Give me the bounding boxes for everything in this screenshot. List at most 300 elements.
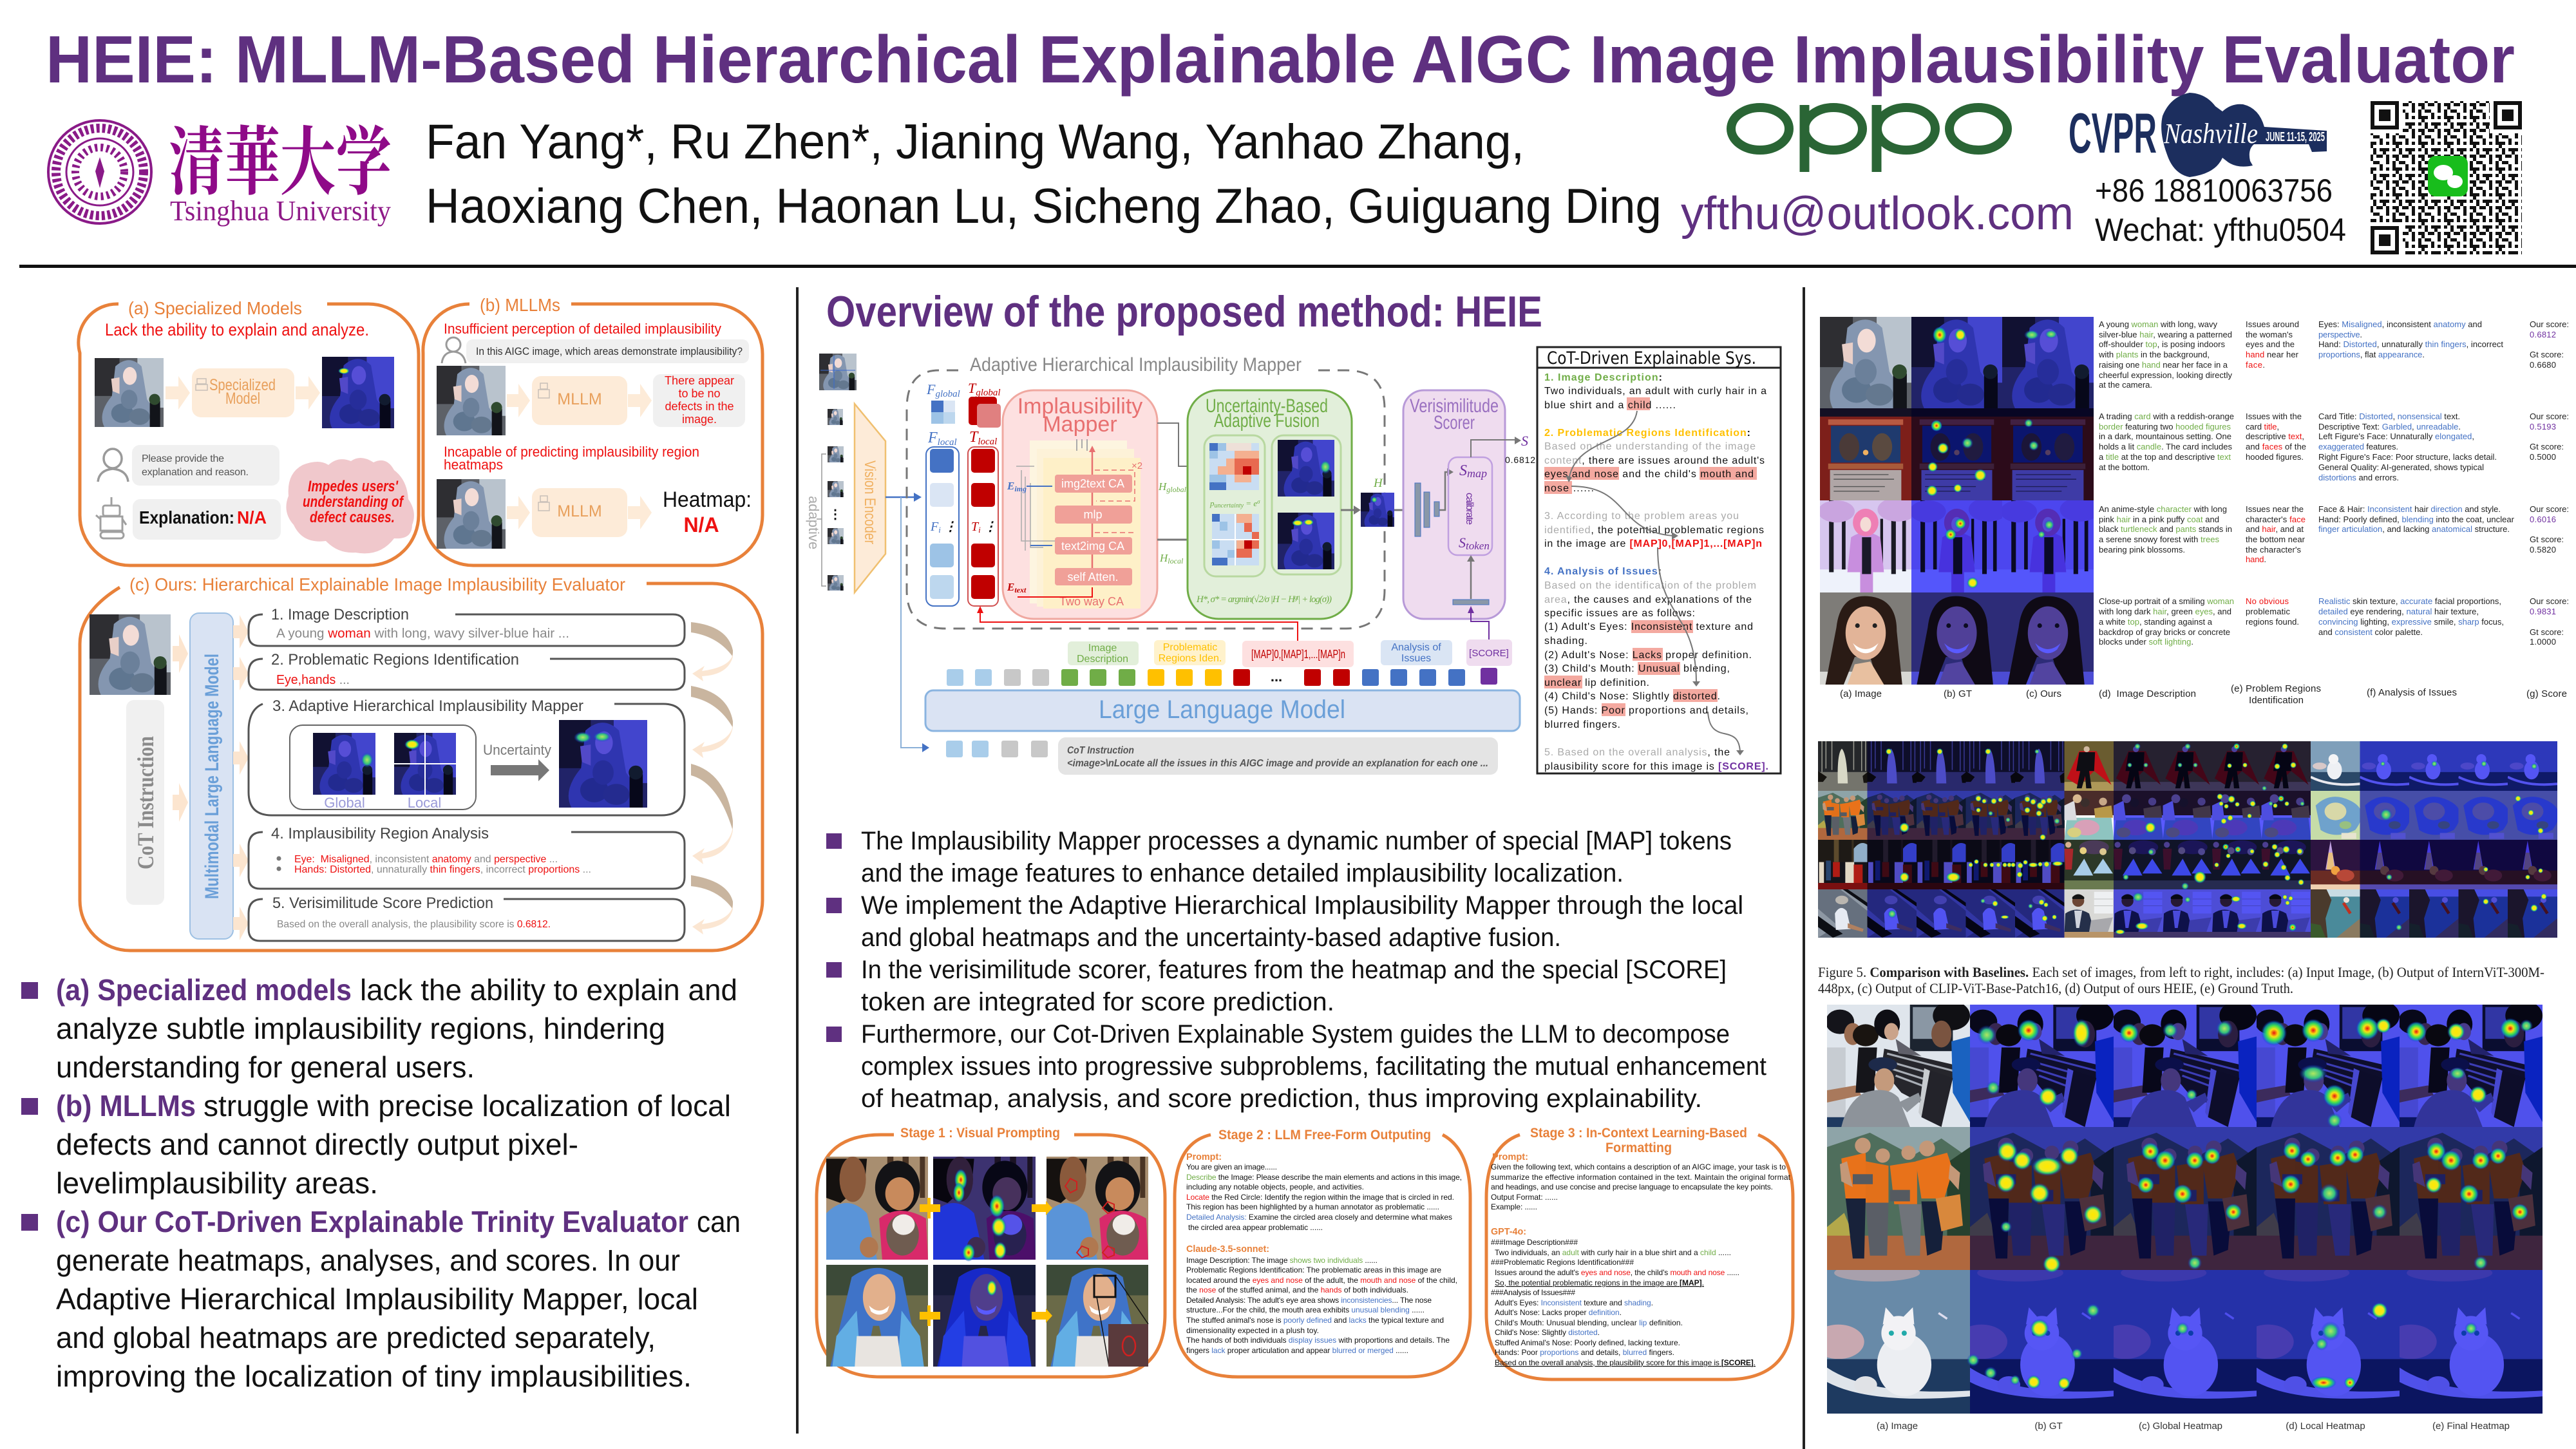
implausibility mapper: img: [1014, 484, 1027, 493]
authors: [426, 115, 1662, 234]
uncertainty grid global: [1209, 443, 1259, 490]
panel heading: CoT-Driven Explainable Sys.: [1547, 348, 1756, 368]
row 2 text: border featuring two hooded figures: [2099, 422, 2231, 431]
bullet (a): analyze subtle implausibility regions, hindering: [56, 1012, 665, 1045]
GPT response text: So, the potential problematic regions in the image are [MAP].: [1495, 1278, 1704, 1287]
prompt text: This region has been highlighted by a human annotator as problematic ......: [1186, 1202, 1439, 1211]
GPT response text: Adult's Nose: Lacks proper definition.: [1495, 1308, 1622, 1317]
step 3: [249, 697, 685, 815]
bullet: fusion: We implement the Adaptive Hierarchical Implausibility Mapper through the local: [861, 891, 1743, 920]
verisimilitude scorer: S: [1459, 462, 1467, 479]
row 2 text: card title,: [2246, 422, 2279, 431]
mapper dashed frame: Adaptive Hierarchical Implausibility Mapper: [970, 354, 1302, 375]
bullet: scorer: token are integrated for score prediction.: [861, 988, 1334, 1016]
token legend: Analysis of: [1391, 642, 1441, 653]
explanation text: in the image are [MAP]0,[MAP]1,...[MAP]n: [1544, 538, 1762, 549]
feature tokens F: i: [938, 525, 941, 535]
cat hot spots: [1967, 1302, 2477, 1390]
callout cloud: understanding of: [303, 493, 404, 511]
row 3 text: Gt score:: [2530, 535, 2564, 544]
row 1 text: raising one hand near her face in a: [2099, 360, 2228, 370]
GPT response text: Issues around the adult's eyes and nose, the child's mouth and nose ......: [1495, 1268, 1739, 1277]
prompt text: and headings, and use concise and precise language to encapsulate the key points.: [1491, 1182, 1773, 1191]
red MAP connector: [977, 606, 1298, 641]
feature tokens F: local: [938, 437, 957, 448]
step 2: Eye,hands ...: [276, 673, 350, 687]
column captions: (f) Analysis of Issues: [2367, 687, 2457, 698]
row 1 text: perspective.: [2318, 330, 2362, 339]
prompt text: Output Format: ......: [1491, 1193, 1558, 1202]
Claude response text: The hands of both individuals display issues with proportions and details. The: [1186, 1336, 1450, 1345]
highlights: [1544, 397, 1757, 716]
row 4 scenes: [1818, 889, 2557, 938]
row 2 text: descriptive text,: [2246, 431, 2304, 441]
row 1 text: Issues around: [2246, 319, 2299, 329]
feature tokens T: T: [968, 380, 976, 396]
explanation text: [1544, 372, 1768, 772]
heat paths: H: [1159, 480, 1166, 493]
row 2 text: and faces of the: [2246, 442, 2306, 451]
row 2 text: 0.5000: [2530, 452, 2556, 462]
input image patches: [806, 354, 857, 591]
grid captions: [1877, 1421, 2510, 1432]
explanation text: area, the causes and explanations of the: [1544, 594, 1752, 605]
grid captions: (a) Image: [1877, 1421, 1918, 1432]
explanation text: (4) Child's Nose: Slightly distorted.: [1544, 691, 1720, 702]
step 4: Eye: Misaligned, inconsistent anatomy and perspective ...: [294, 854, 558, 865]
heading: [1530, 1126, 1747, 1155]
implausibility mapper: Two way CA: [1059, 595, 1124, 608]
row 1 text: eyes and the: [2246, 339, 2295, 349]
feature tokens T: ⋮: [981, 520, 997, 534]
bullet: fusion: [826, 891, 1743, 952]
row 4 text: regions found.: [2246, 617, 2299, 627]
response bubble: There appear: [665, 374, 734, 387]
explanation text: 5. Based on the overall analysis, the: [1544, 747, 1730, 758]
GPT response text: Adult's Eyes: Inconsistent texture and shading.: [1495, 1298, 1653, 1307]
text block: left bullets: [21, 973, 741, 1393]
row 3 text: the character's: [2246, 545, 2302, 554]
verisimilitude scorer: 0.6812: [1505, 455, 1535, 465]
row 3 text: 0.5820: [2530, 545, 2556, 554]
Claude response text: located around the eyes and nose of the adult, the mouth and nose of the child,: [1186, 1276, 1457, 1285]
callout cloud: [286, 458, 414, 553]
token legend: [1068, 639, 1512, 667]
step 1: A young woman with long, wavy silver-blue hair ...: [276, 627, 569, 641]
Claude response text: [1186, 1244, 1457, 1355]
heat overlays: [1868, 741, 2557, 938]
column captions: (c) Ours: [2026, 688, 2061, 699]
figure caption: [1818, 964, 2544, 996]
MLLM box: MLLM: [557, 502, 602, 520]
Claude response text: dimensionality expected in a plush toy.: [1186, 1326, 1319, 1335]
heat paths: global: [1166, 485, 1187, 494]
prompt text: You are given an image......: [1186, 1162, 1277, 1171]
row 1 text: 0.6812: [2530, 330, 2556, 339]
row 2 text: [2099, 412, 2569, 482]
bullet (a): lack the ability to explain and: [360, 973, 737, 1007]
row 2 text: a title at the top and descriptive text: [2099, 452, 2231, 462]
attention blocks: self Atten.: [1067, 571, 1119, 583]
adaptive fusion: [1188, 390, 1352, 619]
vision encoder: [855, 404, 886, 592]
grid captions: (b) GT: [2034, 1421, 2063, 1432]
fusion loss formula: gt: [1294, 594, 1299, 601]
plus and arrow icons: [920, 1198, 1052, 1326]
row: cat scene: [1813, 1264, 2543, 1414]
row 3 text: Issues near the: [2246, 504, 2304, 514]
bullet (c): Adaptive Hierarchical Implausibility Mapper, local: [56, 1282, 698, 1316]
orange shirts hot spots: [1996, 1141, 2528, 1273]
column captions: (a) Image: [1840, 688, 1882, 699]
row: office scene: [1826, 1001, 2543, 1127]
bullet: fusion: and global heatmaps and the uncertainty-based adaptive fusion.: [861, 923, 1561, 952]
explanation bubble: Explanation:: [139, 507, 234, 527]
bullet (c): (c) Our CoT-Driven Explainable Trinity Evaluator: [56, 1205, 688, 1238]
verisimilitude scorer: Scorer: [1434, 412, 1475, 433]
university name in English: Tsinghua University: [170, 195, 391, 227]
bullet (c): can: [697, 1205, 741, 1238]
row 1 text: [2098, 319, 2569, 390]
row 1 text: hand near her: [2246, 350, 2299, 359]
bullet (c): improving the localization of tiny implausibilities.: [56, 1359, 692, 1393]
input image: [95, 358, 164, 427]
subheading: Lack the ability to explain and analyze.: [105, 320, 369, 339]
contact: +86 18810063756: [2095, 173, 2333, 209]
uncertainty arrow: Uncertainty: [483, 742, 551, 758]
feature tokens F: F: [927, 381, 935, 397]
Nashville script: Nashville: [2163, 118, 2258, 149]
bullet: explainable system: of heatmap, analysis, and score prediction, thus improving explainability.: [861, 1084, 1702, 1113]
panel: Stage 3 In-Context Learning-Based Formatting: [1486, 1126, 1793, 1379]
multimodal LLM bar: [190, 613, 233, 939]
architecture diagram: [806, 354, 1535, 775]
row 1 text: A young woman with long, wavy: [2099, 319, 2218, 329]
input image: [437, 366, 506, 435]
row 3 text: Our score:: [2530, 504, 2569, 514]
explanation text: blurred fingers.: [1544, 719, 1620, 730]
row 4 text: Our score:: [2530, 596, 2569, 606]
row: orange shirts scene: [1827, 1127, 2543, 1270]
QR code: [2371, 101, 2522, 254]
arrow heads: [1566, 475, 1744, 755]
panel: CoT-Driven Explainable System: [1537, 347, 1781, 773]
feature tokens T: [968, 380, 1001, 606]
explanation text: identified, the potential problematic regions: [1544, 525, 1764, 536]
row 2 text: hooded figures.: [2246, 452, 2304, 462]
GPT response text: [1491, 1226, 1756, 1367]
token legend: [SCORE]: [1469, 648, 1509, 659]
prompt bubble: [132, 445, 279, 486]
explanation text: content, there are issues around the adult's: [1544, 455, 1765, 466]
CoT instruction: [126, 700, 164, 905]
arrow: [296, 376, 320, 410]
subheading: [444, 444, 699, 473]
row 1 text: silver-blue hair, wearing a patterned: [2099, 330, 2232, 339]
heatmap comparison grid: [1813, 1001, 2543, 1432]
row 3 text: 0.6016: [2530, 515, 2556, 524]
verisimilitude scorer: S: [1459, 535, 1466, 551]
question bubble: [466, 339, 749, 363]
verisimilitude scorer: [1403, 390, 1535, 639]
GPT response text: Child's Mouth: Unusual blending, unclear lip definition.: [1495, 1318, 1683, 1327]
Claude response text: Image Description: The image shows two individuals ......: [1186, 1256, 1378, 1265]
GPT response text: Stuffed Animal's Nose: Poorly defined, lacking texture.: [1495, 1338, 1680, 1347]
row 2 text: holds a lit candle. The card includes: [2099, 442, 2232, 451]
row 3 text: pink hair in a pink puffy coat and: [2099, 515, 2219, 524]
bullet: explainable system: [826, 1020, 1766, 1113]
row 2 text: Descriptive Text: Garbled, unreadable.: [2318, 422, 2461, 431]
heat images: [1278, 440, 1334, 497]
implausibility mapper: [1003, 390, 1157, 619]
explanation text: (2) Adult's Nose: Lacks proper definition.: [1544, 650, 1752, 661]
explanation text: shading.: [1544, 636, 1587, 647]
fused heatmap H: [1341, 477, 1412, 527]
GPT response text: Based on the overall analysis, the plausibility score for this image is [SCORE].: [1495, 1358, 1756, 1367]
input arrows: [173, 615, 249, 940]
explanation text: (3) Child's Mouth: Unusual blending,: [1544, 663, 1730, 674]
heat overlay: [1970, 1005, 2543, 1414]
heat paths: H: [1160, 552, 1168, 564]
token legend: Issues: [1401, 653, 1431, 664]
result images: [1818, 317, 2100, 685]
large language model bar: Large Language Model: [1099, 696, 1345, 724]
specialized model box: [192, 368, 294, 417]
row 4 text: a white top, standing against a: [2099, 617, 2213, 627]
panel: (c) Ours: [80, 574, 762, 951]
row 3 text: character's face: [2246, 515, 2306, 524]
input image: [437, 479, 506, 549]
uncertainty formula: p: [1210, 498, 1215, 508]
explanation text: Two individuals, an adult with curly hair in a: [1544, 386, 1766, 397]
bullet (b): [21, 1089, 731, 1200]
row 1 text: Our score:: [2530, 319, 2569, 329]
panel: (a) Specialized Models: [79, 298, 419, 565]
grid captions: (c) Global Heatmap: [2139, 1421, 2222, 1432]
panel: Stage 2 LLM Free-Form Outputing: [1175, 1128, 1470, 1377]
subheading: Incapable of predicting implausibility region: [444, 444, 699, 460]
icon: WeChat: [2428, 156, 2468, 196]
heading: (b) MLLMs: [480, 295, 560, 315]
explanation text: nose ......: [1544, 483, 1594, 494]
column captions: (g) Score: [2526, 688, 2567, 699]
row 1 text: proportions, flat appearance.: [2318, 350, 2425, 359]
bullet (b): defects and cannot directly output pixel-: [56, 1128, 578, 1161]
MLLM box: [532, 376, 627, 425]
input image patches: ⋮: [829, 507, 842, 522]
attention blocks: text2img CA: [1061, 540, 1124, 553]
bullet (c): and global heatmaps are predicted separately,: [56, 1321, 656, 1354]
bullet (b): levelimplausibility areas.: [56, 1166, 378, 1200]
row 1 text: cheerful expression, looking directly: [2099, 370, 2232, 380]
CoT instruction: CoT Instruction: [133, 736, 158, 869]
contact: [2095, 173, 2346, 248]
explanation bubble: N/A: [237, 507, 267, 527]
row 2 text: Card Title: Distorted, nonsensical text.: [2318, 412, 2460, 421]
prompt text: including any notable objects, people, and activities.: [1186, 1182, 1364, 1191]
row 4 text: problematic: [2246, 607, 2290, 616]
row 4 text: convincing lighting, expressive smile, sharp focus,: [2318, 617, 2504, 627]
title: HEIE: MLLM-Based Hierarchical Explainable AIGC Image Implausibility Evaluator: [46, 23, 2515, 97]
icon: user: [98, 449, 128, 482]
specialized model box: Specialized: [209, 376, 276, 394]
input image patches: adaptive: [806, 496, 822, 549]
row 2 text: at the bottom.: [2099, 462, 2150, 472]
row 1 text: Eyes: Misaligned, inconsistent anatomy and: [2318, 319, 2482, 329]
bullet: scorer: In the verisimilitude scorer, features from the heatmap and the special [SCORE]: [861, 956, 1727, 984]
multimodal LLM bar: Multimodal Large Language Model: [202, 654, 223, 899]
prompt text: Describe the Image: Please describe the main elements and actions in this image,: [1186, 1173, 1462, 1182]
callout cloud: Impedes users': [308, 478, 399, 495]
column captions: (b) GT: [1944, 688, 1972, 699]
logo: CVPR Nashville: [2069, 93, 2327, 177]
vision encoder: Vision Encoder: [861, 460, 878, 544]
attention blocks: img2text CA: [1061, 477, 1124, 490]
row 2 text: exaggerated features.: [2318, 442, 2398, 451]
Claude response text: structure...For the child, the mouth area exhibits unusual blending ......: [1186, 1305, 1425, 1314]
row 4 text: [2098, 596, 2569, 647]
global and local heatmaps: [290, 725, 476, 811]
verisimilitude scorer: calibrate: [1464, 493, 1475, 525]
feature tokens F: [926, 381, 960, 606]
input image: [90, 614, 171, 695]
bullet (b): (b) MLLMs: [56, 1089, 196, 1122]
prompt text: summarize the effective information contained in the text. Maintain the original format: [1491, 1173, 1791, 1182]
attention blocks: mlp: [1083, 508, 1103, 521]
GPT response text: GPT-4o:: [1491, 1226, 1526, 1237]
row 1 text: 0.6680: [2530, 360, 2556, 370]
token legend: Regions Iden.: [1159, 653, 1222, 664]
response bubble: [653, 374, 745, 427]
university name in Chinese: 清華大学: [169, 102, 392, 210]
arrow: [628, 496, 652, 529]
row 3 text: Face & Hair: Inconsistent hair direction and style.: [2318, 504, 2501, 514]
encoder arrows: [886, 493, 929, 752]
token legend: Image: [1088, 643, 1117, 654]
step 4: [249, 825, 685, 889]
step 4: Hands: Distorted, unnaturally thin fingers, incorrect proportions ...: [294, 864, 591, 875]
prompt text: Example: ......: [1491, 1202, 1537, 1211]
logo: Tsinghua University: [48, 102, 392, 227]
results table: [1818, 317, 2569, 706]
explanation text: blue shirt and a child ......: [1544, 400, 1676, 411]
row 2 text: Gt score:: [2530, 442, 2564, 451]
row 4 text: 0.9831: [2530, 607, 2556, 616]
heatmap output: [322, 357, 394, 428]
subheading: heatmaps: [444, 457, 503, 473]
uncertainty formula: σ: [1257, 498, 1260, 505]
GPT response text: Two individuals, an adult with curly hair in a blue shirt and a child ......: [1495, 1248, 1731, 1257]
token legend: [MAP]0,[MAP]1,...[MAP]n: [1251, 648, 1345, 661]
heat paths: local: [1168, 556, 1184, 565]
header divider: [19, 265, 2576, 268]
feature tokens F: ⋮: [941, 520, 957, 534]
row 3 text: bearing pink blossoms.: [2099, 545, 2185, 554]
implausibility mapper: ×2: [1132, 460, 1142, 471]
icon: Tsinghua seal: [48, 120, 151, 223]
row 1 text: the woman's: [2246, 330, 2293, 339]
row 4 text: backdrop of gray bricks or concrete: [2099, 627, 2230, 637]
global and local heatmaps: Local: [408, 795, 441, 811]
row 1 text: face.: [2246, 360, 2265, 370]
row 3 text: and hair, and at: [2246, 524, 2304, 534]
feature tokens F: F: [928, 430, 938, 446]
grid captions: (d) Local Heatmap: [2286, 1421, 2365, 1432]
row 4 text: No obvious: [2246, 596, 2289, 606]
bullet (c): [21, 1205, 741, 1393]
heading: Stage 1 : Visual Prompting: [900, 1126, 1060, 1141]
prompt text: Detailed Analysis: Examine the circled area closely and determine what makes: [1186, 1213, 1452, 1222]
explanation text: (5) Hands: Poor proportions and details,: [1544, 705, 1748, 716]
GPT response text: Hands: Poor proportions and details, blurred fingers.: [1495, 1348, 1674, 1357]
prompt bubble: explanation and reason.: [142, 467, 249, 478]
step 3: 3. Adaptive Hierarchical Implausibility Mapper: [272, 697, 583, 715]
token row: [947, 668, 1497, 686]
row 3 text: [2099, 504, 2569, 564]
row 4 text: Close-up portrait of a smiling woman: [2099, 596, 2234, 606]
Claude response text: Claude-3.5-sonnet:: [1186, 1244, 1269, 1255]
explanation text: Based on the identification of the problem: [1544, 580, 1756, 591]
GPT response text: ###Analysis of Issues###: [1491, 1288, 1575, 1297]
icon: robot: [96, 497, 126, 538]
heading: Formatting: [1605, 1141, 1672, 1155]
authors: Fan Yang*, Ru Zhen*, Jianing Wang, Yanhao Zhang,: [426, 115, 1524, 169]
specialized model box: Model: [225, 390, 260, 408]
CoT instruction row: CoT Instruction: [1067, 745, 1134, 756]
response bubble: defects in the: [665, 400, 734, 413]
row 4 text: Realistic skin texture, accurate facial proportions,: [2318, 596, 2501, 606]
bullet (b): struggle with precise localization of local: [204, 1089, 731, 1122]
callout cloud: defect causes.: [310, 509, 395, 526]
explanation text: unclear lip definition.: [1544, 677, 1649, 688]
token legend: Problematic: [1163, 642, 1217, 653]
column captions: [1840, 683, 2567, 706]
feature tokens T: local: [978, 437, 997, 447]
response bubble: image.: [682, 413, 717, 426]
MLLM box: MLLM: [557, 390, 602, 408]
comparison hot spots: second group: [2115, 743, 2305, 934]
row 2 scenes: [1818, 791, 2559, 840]
prompt text: Given the following text, which contains a description of an AIGC image, your task is to: [1491, 1162, 1786, 1171]
explanation text: 1. Image Description:: [1544, 372, 1662, 383]
prompt text: Locate the Red Circle: Identify the region within the image that is circled in red.: [1186, 1193, 1454, 1202]
token row: ...: [1271, 668, 1282, 685]
grid captions: (e) Final Heatmap: [2432, 1421, 2510, 1432]
explanation text: 3. According to the problem areas you: [1544, 511, 1739, 522]
global and local heatmaps: Global: [324, 795, 365, 811]
row 1 text: with plants in the background,: [2098, 350, 2210, 359]
bullet: explainable system: Furthermore, our Cot-Driven Explainable System guides the LLM to decompose: [861, 1020, 1730, 1048]
comparison hot spots: first group: [1886, 748, 2063, 922]
implausibility mapper: E: [1007, 581, 1014, 593]
feature tokens T: T: [971, 520, 978, 534]
column captions: Identification: [2249, 695, 2304, 706]
step 2: 2. Problematic Regions Identification: [271, 651, 519, 668]
Claude response text: Problematic Regions Identification: The problematic areas in this image are: [1186, 1265, 1441, 1274]
implausibility mapper: E: [1007, 480, 1014, 492]
curved arrows: [1569, 411, 1740, 752]
bullet: explainable system: complex issues into progressive subproblems, facilitating the mutual enhancement: [861, 1052, 1766, 1081]
row 2 text: Right Figure's Face: Poor structure, lacks detail.: [2318, 452, 2497, 462]
heatmap result: Heatmap:: [663, 488, 752, 512]
bullet: mapper: The Implausibility Mapper processes a dynamic number of special [MAP] tokens: [861, 827, 1732, 855]
column captions: (e) Problem Regions: [2231, 683, 2321, 694]
verisimilitude scorer: Verisimilitude: [1410, 395, 1499, 417]
arrow: [166, 376, 190, 410]
row 3 text: An anime-style character with long: [2099, 504, 2227, 514]
prompt text: the circled area appear problematic ......: [1188, 1223, 1323, 1232]
row 1 text: Gt score:: [2530, 350, 2564, 359]
